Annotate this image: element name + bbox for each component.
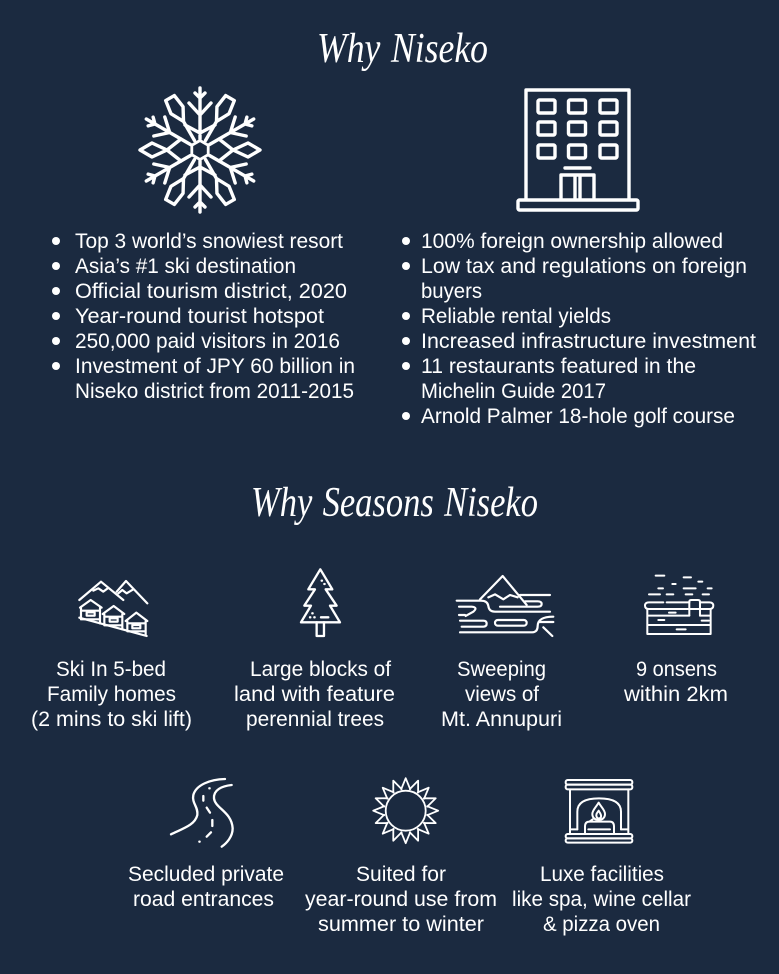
caption: Secluded private xyxy=(128,863,284,886)
bullet list: investment highlights: 11 restaurants featured in the xyxy=(421,355,696,378)
bullet list: Niseko highlights: Asia’s #1 ski destination xyxy=(75,255,296,278)
bullet list: Niseko highlights: Official tourism district, 2020 xyxy=(75,280,347,303)
caption: Sweeping xyxy=(457,658,546,681)
caption: summer to winter xyxy=(318,913,484,936)
caption: (2 mins to ski lift) xyxy=(31,708,192,731)
caption: land with feature xyxy=(234,683,395,706)
feature: private road xyxy=(128,779,284,911)
caption: year-round use from xyxy=(305,888,497,911)
caption: road entrances xyxy=(133,888,274,911)
caption: Ski In 5-bed xyxy=(56,658,166,681)
bullet list: investment highlights: Low tax and regulations on foreign xyxy=(421,255,747,278)
icon: winding road xyxy=(171,779,233,847)
icon: mountain chalets xyxy=(79,581,147,636)
bullet list: investment highlights: buyers xyxy=(421,280,482,303)
caption: Suited for xyxy=(356,863,446,886)
bullet list: investment highlights: Increased infrastructure investment xyxy=(421,330,756,353)
icon: fireplace xyxy=(566,780,632,843)
caption: like spa, wine cellar xyxy=(512,888,691,911)
feature: luxe facilities xyxy=(512,780,691,936)
icon: pine tree xyxy=(301,569,340,636)
bullet list: Niseko highlights: 250,000 paid visitors in 2016 xyxy=(75,330,340,353)
icon: sun xyxy=(373,778,438,843)
caption: Family homes xyxy=(47,683,176,706)
bullet list: Niseko highlights: Top 3 world’s snowiest resort xyxy=(75,230,343,253)
bullet list: Niseko highlights xyxy=(52,230,355,403)
caption: views of xyxy=(465,683,539,706)
caption: perennial trees xyxy=(246,708,384,731)
caption: within 2km xyxy=(623,683,728,706)
caption: 9 onsens xyxy=(636,658,717,681)
caption: Mt. Annupuri xyxy=(441,708,562,731)
caption: Luxe facilities xyxy=(540,863,664,886)
caption xyxy=(441,658,562,731)
feature: nearby onsens xyxy=(623,576,728,706)
caption xyxy=(305,863,497,936)
caption xyxy=(31,658,192,731)
title: Why Niseko: Why Niseko xyxy=(317,26,488,72)
feature: year-round use xyxy=(305,778,497,936)
caption: Large blocks of xyxy=(250,658,391,681)
caption xyxy=(512,863,691,936)
bullet list: investment highlights: 100% foreign ownership allowed xyxy=(421,230,723,253)
bullet list: Niseko highlights: Investment of JPY 60 billion in xyxy=(75,355,355,378)
caption xyxy=(128,863,284,911)
title: Why Seasons Niseko: Why Seasons Niseko xyxy=(251,480,538,526)
feature: mountain views xyxy=(441,576,562,731)
icon: steaming onsen xyxy=(645,576,713,634)
caption xyxy=(234,658,395,731)
feature: ski-in family homes xyxy=(31,581,192,731)
caption xyxy=(623,658,728,706)
icon: snowflake xyxy=(140,88,260,212)
icon: Mt. Annupuri xyxy=(457,576,553,636)
bullet list: Niseko highlights: Year-round tourist hotspot xyxy=(75,305,324,328)
bullet list: investment highlights: Arnold Palmer 18-hole golf course xyxy=(421,405,735,428)
bullet list: investment highlights: Michelin Guide 2017 xyxy=(421,380,606,403)
icon: building xyxy=(518,90,638,210)
feature: large land blocks xyxy=(234,569,395,731)
bullet list: investment highlights xyxy=(402,230,756,428)
bullet list: Niseko highlights: Niseko district from 2011-2015 xyxy=(75,380,354,403)
bullet list: investment highlights: Reliable rental yields xyxy=(421,305,611,328)
caption: & pizza oven xyxy=(543,913,660,936)
